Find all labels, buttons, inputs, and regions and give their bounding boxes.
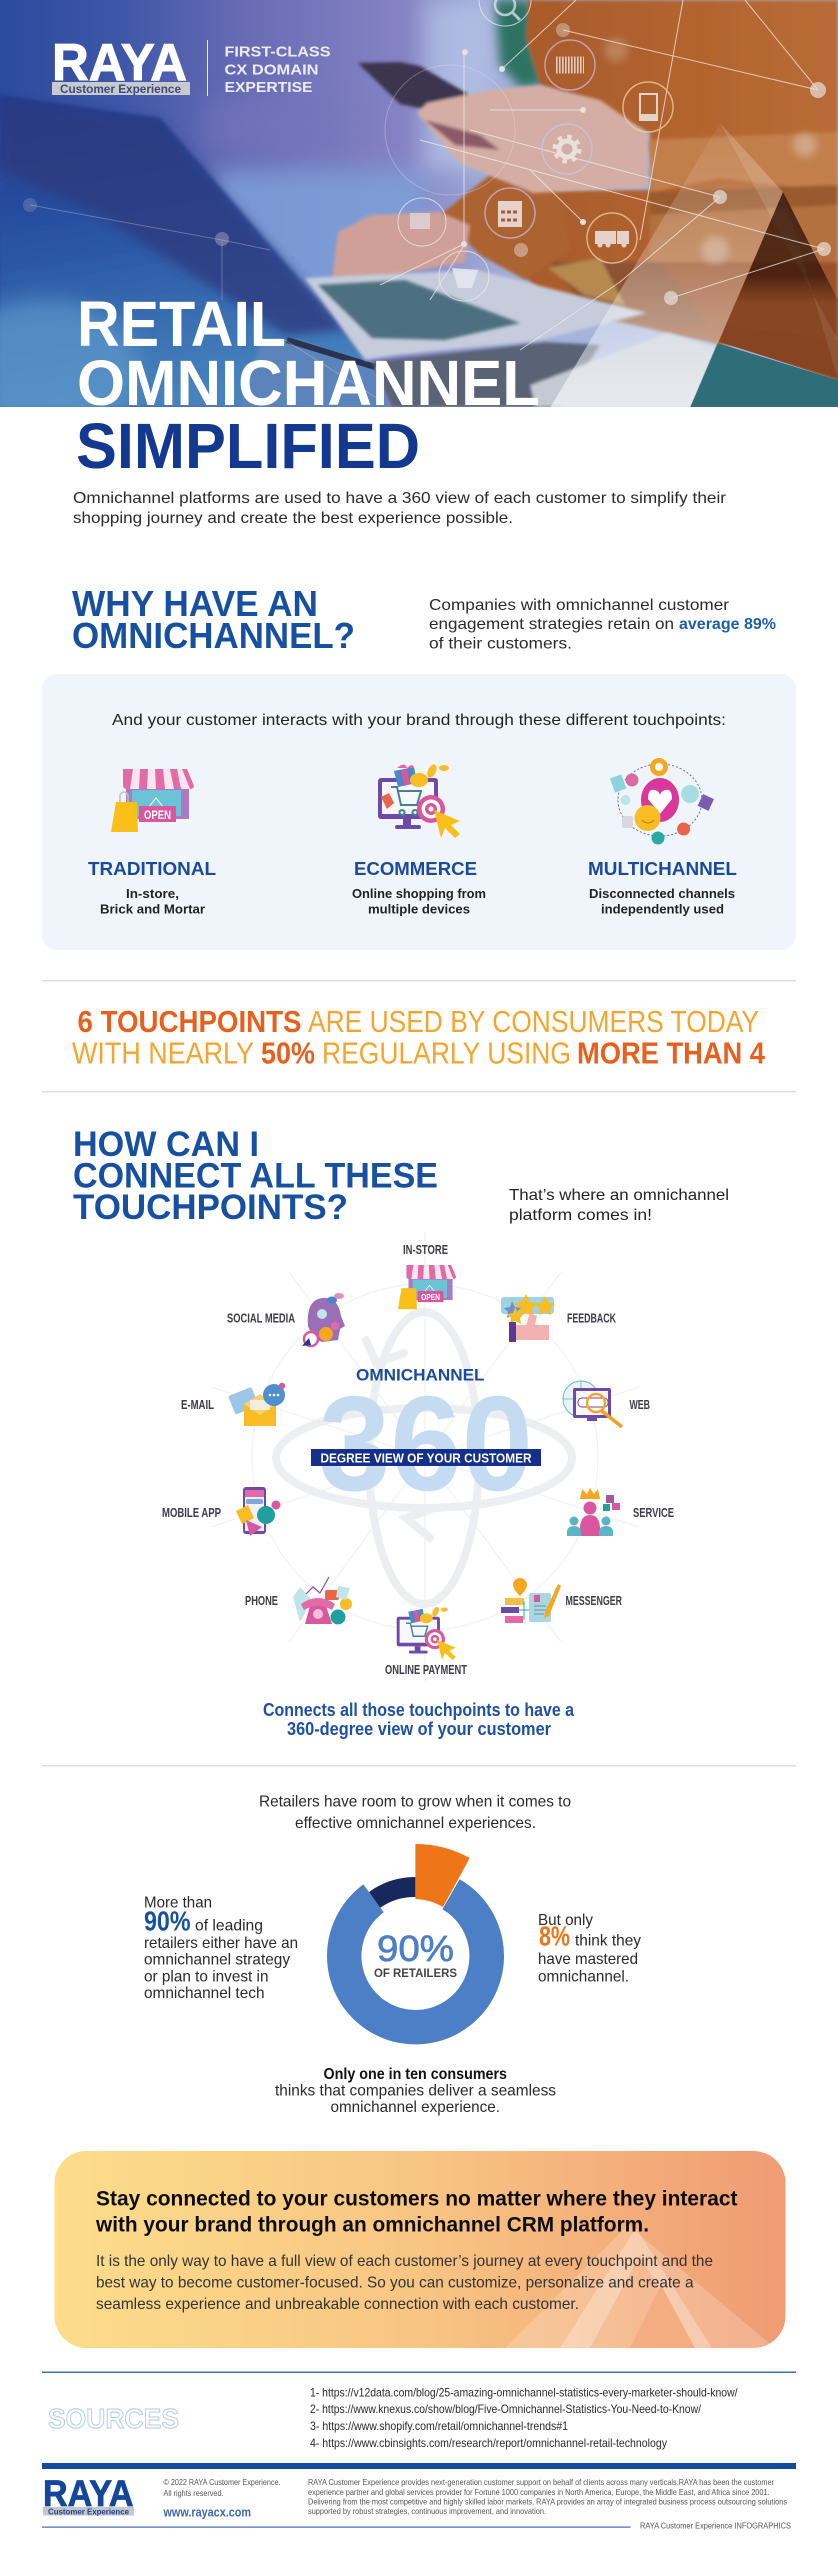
channel labels: WEB <box>630 1398 650 1412</box>
channel labels: SERVICE <box>633 1506 674 1520</box>
company description: experience partner and global services provider for Fortune 1000 companies in North America, Europe, the Middle East, and Africa since 2001. <box>308 2487 770 2497</box>
callout: touchpoint usage: MORE THAN 4 <box>577 1036 766 1070</box>
touchpoint descriptions: In-store, <box>126 886 179 901</box>
heading: how can I connect: TOUCHPOINTS? <box>73 1188 348 1227</box>
call to action body: seamless experience and unbreakable connection with each customer. <box>96 2296 579 2313</box>
icon: web <box>563 1381 622 1427</box>
platform text: That’s where an omnichannel <box>509 1187 729 1204</box>
callout: touchpoint usage: 50% <box>261 1036 315 1070</box>
left stat text: of leading <box>195 1918 263 1934</box>
left stat text: or plan to invest in <box>144 1968 268 1986</box>
copyright <box>164 2477 280 2498</box>
network of connected icons <box>30 0 824 400</box>
right stat text: 8% <box>539 1920 570 1952</box>
left stat text: retailers either have an <box>144 1935 298 1952</box>
blue segment <box>327 1879 504 2044</box>
touchpoint titles: MULTICHANNEL <box>588 859 737 879</box>
header logo: RAYA Customer Experience: Customer Experience <box>60 84 181 96</box>
company description: RAYA Customer Experience provides next-generation customer support on behalf of clients across many verticals.RAYA has been the customer <box>308 2477 774 2487</box>
donut chart <box>327 1844 504 2044</box>
icon: messenger <box>501 1578 561 1623</box>
copyright: © 2022 RAYA Customer Experience. <box>164 2477 280 2487</box>
laptop <box>0 95 838 430</box>
channel labels: MOBILE APP <box>162 1506 221 1520</box>
tagline: FIRST-CLASS <box>224 44 330 60</box>
call to action body: It is the only way to have a full view of each customer’s journey at every touchpoint and the <box>96 2253 713 2270</box>
translucent logo triangles <box>550 123 838 408</box>
tagline: CX DOMAIN <box>224 62 318 78</box>
icon: e-mail <box>228 1383 285 1426</box>
company description <box>308 2477 787 2516</box>
retailers intro text: effective omnichannel experiences. <box>295 1815 536 1832</box>
icon: store <box>111 769 194 832</box>
donut center value: 90% <box>377 1928 454 1969</box>
panel intro text: And your customer interacts with your brand through these different touchpoints: <box>112 712 726 729</box>
callout: touchpoint usage: WITH NEARLY <box>72 1036 254 1070</box>
title: SIMPLIFIED <box>76 410 420 482</box>
icon: multichannel <box>610 758 714 844</box>
right stat text: have mastered <box>538 1951 638 1968</box>
callout: touchpoint usage: ARE USED BY CONSUMERS TODAY <box>308 1004 759 1039</box>
channel labels: FEEDBACK <box>567 1312 616 1326</box>
heading: how can I connect: HOW CAN I <box>73 1125 259 1164</box>
consumers text: Only one in ten consumers <box>324 2066 507 2083</box>
footer tag: RAYA Customer Experience INFOGRAPHICS <box>640 2520 791 2530</box>
consumers text: thinks that companies deliver a seamless <box>275 2082 556 2100</box>
header logo: RAYA Customer Experience: RAYA <box>52 34 187 92</box>
touchpoint descriptions <box>100 886 735 916</box>
channel labels: IN-STORE <box>403 1243 448 1257</box>
retention stat text: of their customers. <box>429 636 572 652</box>
panel: call to action <box>54 2151 786 2348</box>
icon: phone <box>293 1577 352 1624</box>
retention stat text <box>429 597 776 652</box>
call to action heading <box>95 2188 738 2236</box>
intro text: Omnichannel platforms are used to have a 360 view of each customer to simplify their <box>73 490 727 507</box>
source links: 4- https://www.cbinsights.com/research/report/omnichannel-retail-technology <box>310 2436 667 2450</box>
company description: supported by robust strategies, continuous improvement, and innovation. <box>308 2506 546 2516</box>
source links <box>310 2386 738 2450</box>
call to action heading: Stay connected to your customers no matter where they interact <box>96 2188 738 2210</box>
source links: 2- https://www.knexus.co/show/blog/Five-Omnichannel-Statistics-You-Need-to-Know/ <box>310 2402 702 2416</box>
right stat text: omnichannel. <box>538 1968 629 1986</box>
heading: why have an omnichannel: WHY HAVE AN <box>72 583 318 624</box>
touchpoint titles <box>88 859 737 879</box>
consumers text <box>275 2066 556 2116</box>
retention stat text: engagement strategies retain on <box>429 616 674 633</box>
touchpoint titles: TRADITIONAL <box>88 859 216 879</box>
copyright: All rights reserved. <box>164 2488 224 2498</box>
big 360: 360 <box>319 1368 533 1519</box>
retailers intro text <box>259 1794 571 1832</box>
left stat text: 90% <box>144 1906 191 1936</box>
wheel caption <box>263 1700 575 1739</box>
left stat text: omnichannel tech <box>144 1985 264 2002</box>
intro text <box>73 490 727 527</box>
left stat text <box>144 1894 298 2002</box>
wheel caption: 360-degree view of your customer <box>287 1719 551 1739</box>
left stat text: More than <box>144 1894 212 1912</box>
touchpoint descriptions: independently used <box>601 902 724 916</box>
center band: DEGREE VIEW OF YOUR CUSTOMER <box>320 1450 532 1466</box>
channel labels: E-MAIL <box>181 1398 214 1412</box>
channel labels: PHONE <box>245 1594 278 1608</box>
heading: how can I connect: CONNECT ALL THESE <box>73 1156 438 1196</box>
center heading: OMNICHANNEL <box>356 1366 484 1384</box>
retention stat text: average 89% <box>679 616 776 633</box>
retailers intro text: Retailers have room to grow when it comes to <box>259 1794 571 1810</box>
website: www.rayacx.com <box>163 2506 251 2520</box>
donut center label: OF RETAILERS <box>374 1966 457 1980</box>
icon: online payment <box>397 1606 456 1660</box>
footer logo: Customer Experience <box>48 2506 129 2516</box>
intro text: shopping journey and create the best experience possible. <box>73 510 513 527</box>
heading: how can I connect <box>73 1125 438 1227</box>
channel labels: SOCIAL MEDIA <box>227 1312 295 1326</box>
touchpoint descriptions: Online shopping from <box>352 886 486 901</box>
wheel ring and spokes <box>211 1232 639 1682</box>
channel labels: ONLINE PAYMENT <box>385 1663 467 1677</box>
call to action heading: with your brand through an omnichannel CRM platform. <box>95 2214 649 2236</box>
callout: touchpoint usage <box>72 1004 766 1070</box>
source links: 1- https://v12data.com/blog/25-amazing-omnichannel-statistics-every-marketer-should-know/ <box>310 2386 738 2400</box>
footer logo: RAYA <box>43 2473 134 2514</box>
sources heading: SOURCES <box>48 2403 179 2434</box>
call to action body <box>96 2253 713 2313</box>
call to action body: best way to become customer-focused. So you can customize, personalize and create a <box>96 2274 694 2292</box>
touchpoint descriptions: Disconnected channels <box>589 886 735 901</box>
left stat text: omnichannel strategy <box>144 1952 290 1968</box>
hero icon glyphs <box>410 65 657 288</box>
icon: mobile app <box>236 1487 280 1536</box>
icon: store: OPEN <box>144 808 171 822</box>
icon: in-store <box>398 1265 456 1309</box>
icon: in-store: OPEN <box>421 1292 440 1302</box>
consumers text: omnichannel experience. <box>330 2099 500 2116</box>
icon: feedback <box>501 1294 555 1342</box>
heading: why have an omnichannel <box>72 583 355 656</box>
diagram: omnichannel wheel <box>162 1232 674 1682</box>
touchpoint descriptions: multiple devices <box>368 902 470 916</box>
navy segment <box>369 1877 415 1908</box>
touchpoint descriptions: Brick and Mortar <box>100 902 205 916</box>
wheel caption: Connects all those touchpoints to have a <box>263 1700 575 1720</box>
title: OMNICHANNEL <box>77 347 540 419</box>
logo divider <box>207 40 208 96</box>
orange segment <box>415 1844 470 1907</box>
touchpoint titles: ECOMMERCE <box>354 859 477 879</box>
panel: touchpoints <box>42 674 796 950</box>
orbit arrows <box>276 1312 572 1604</box>
right stat text: think they <box>575 1932 641 1950</box>
tagline <box>224 44 330 96</box>
callout: touchpoint usage: 6 TOUCHPOINTS <box>78 1004 302 1039</box>
platform text <box>509 1187 729 1224</box>
retention stat text: Companies with omnichannel customer <box>429 597 730 614</box>
hands and phone <box>331 62 647 287</box>
title <box>76 288 540 482</box>
icon: service <box>567 1488 620 1536</box>
platform text: platform comes in! <box>509 1207 652 1224</box>
right stat text: But only <box>538 1912 593 1929</box>
tagline: EXPERTISE <box>224 79 312 96</box>
channel labels: MESSENGER <box>566 1594 622 1608</box>
source links: 3- https://www.shopify.com/retail/omnichannel-trends#1 <box>310 2419 568 2433</box>
channel labels <box>162 1243 674 1677</box>
icon: ecommerce <box>378 763 460 838</box>
callout: touchpoint usage: REGULARLY USING <box>322 1036 571 1070</box>
title: RETAIL <box>77 288 286 360</box>
hero photo banner <box>0 0 838 430</box>
right stat text <box>538 1912 641 1986</box>
icon: social media <box>302 1293 345 1346</box>
sweater <box>440 0 838 350</box>
heading: why have an omnichannel: OMNICHANNEL? <box>72 615 355 656</box>
